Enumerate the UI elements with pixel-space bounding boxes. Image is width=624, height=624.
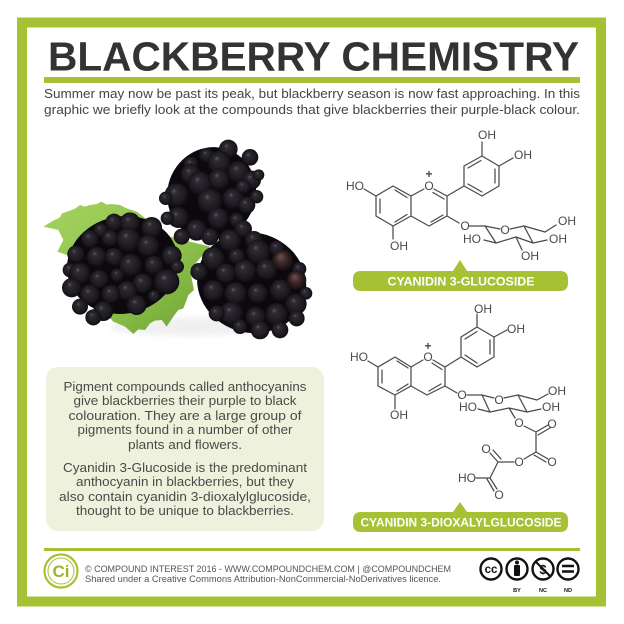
- icon: Creative Commons licence badges: NC: [539, 588, 547, 594]
- top berry: [152, 132, 271, 254]
- panel: anthocyanin description: also contain cyanidin 3-dioxalylglucoside,: [59, 490, 311, 504]
- icon: Creative Commons licence badges: cc: [485, 564, 498, 576]
- photo: blackberries on a leaf: [43, 132, 319, 347]
- panel: anthocyanin description: thought to be unique to blackberries.: [76, 504, 294, 518]
- molecule: cyanidin 3-glucoside: OH: [558, 214, 576, 228]
- molecule: cyanidin 3-glucoside: OH: [514, 148, 532, 162]
- molecule: cyanidin 3-dioxalylglucoside: O: [457, 388, 467, 402]
- icon: Creative Commons licence badges: [480, 558, 578, 594]
- icon: Creative Commons licence badges: BY: [513, 588, 521, 594]
- label: cyanidin 3-glucoside: [353, 260, 568, 291]
- molecule: cyanidin 3-glucoside: OH: [390, 239, 408, 253]
- molecule: cyanidin 3-dioxalylglucoside: OH: [390, 408, 408, 422]
- icon: Creative Commons licence badges: ND: [564, 588, 572, 594]
- footer credits: © COMPOUND INTEREST 2016 - WWW.COMPOUNDCHEM.COM | @COMPOUNDCHEM: [85, 564, 451, 574]
- molecule: cyanidin 3-glucoside: HO: [346, 179, 364, 193]
- footer credits: [85, 564, 451, 584]
- molecule: cyanidin 3-dioxalylglucoside: HO: [458, 471, 476, 485]
- panel: anthocyanin description: Pigment compounds called anthocyanins: [64, 380, 306, 394]
- molecule: cyanidin 3-dioxalylglucoside: O: [423, 350, 433, 364]
- panel: anthocyanin description: give blackberries their purple to black: [74, 394, 297, 408]
- right berry: [184, 218, 319, 347]
- panel: anthocyanin description: plants and flowers.: [128, 438, 242, 452]
- molecule: cyanidin 3-dioxalylglucoside: HO: [350, 350, 368, 364]
- footer credits: Shared under a Creative Commons Attribution-NonCommercial-NoDerivatives licence.: [85, 574, 441, 584]
- leaf: [43, 202, 210, 334]
- molecule: cyanidin 3-dioxalylglucoside: HO: [459, 400, 477, 414]
- molecule: cyanidin 3-dioxalylglucoside: O: [494, 393, 504, 407]
- molecule: cyanidin 3-dioxalylglucoside: OH: [542, 400, 560, 414]
- molecule: cyanidin 3-dioxalylglucoside: +: [424, 339, 432, 353]
- molecule: cyanidin 3-glucoside: OH: [478, 128, 496, 142]
- title: BLACKBERRY CHEMISTRY: [48, 34, 579, 80]
- molecule: cyanidin 3-glucoside: O: [460, 219, 470, 233]
- molecule: cyanidin 3-dioxalylglucoside: OH: [548, 384, 566, 398]
- label: cyanidin 3-dioxalylglucoside: CYANIDIN 3-DIOXALYLGLUCOSIDE: [360, 516, 562, 530]
- panel: anthocyanin description: [46, 367, 324, 531]
- left berry: [58, 206, 188, 325]
- icon: Creative Commons licence badges: $: [539, 562, 547, 577]
- label: cyanidin 3-dioxalylglucoside: [353, 502, 568, 532]
- footer rule: [44, 548, 580, 551]
- molecule: cyanidin 3-glucoside: O: [500, 223, 510, 237]
- molecule: cyanidin 3-dioxalylglucoside: O: [547, 417, 557, 431]
- molecule: cyanidin 3-dioxalylglucoside: O: [547, 455, 557, 469]
- molecule: cyanidin 3-dioxalylglucoside: O: [481, 442, 491, 456]
- molecule: cyanidin 3-dioxalylglucoside: OH: [507, 322, 525, 336]
- molecule: cyanidin 3-glucoside: OH: [521, 249, 539, 263]
- intro text: [44, 86, 580, 117]
- panel: anthocyanin description: colouration. They are a large group of: [68, 409, 302, 423]
- intro text: Summer may now be past its peak, but blackberry season is now fast approaching. In this: [44, 86, 580, 101]
- molecule: cyanidin 3-dioxalylglucoside: OH: [474, 302, 492, 316]
- molecule: cyanidin 3-dioxalylglucoside: O: [494, 488, 504, 502]
- icon: Compound Interest logo: Ci: [52, 562, 70, 581]
- title rule: [44, 77, 580, 83]
- icon: Compound Interest logo: [44, 554, 78, 588]
- molecule: cyanidin 3-glucoside: O: [424, 179, 434, 193]
- molecule: cyanidin 3-dioxalylglucoside: O: [514, 416, 524, 430]
- molecule: cyanidin 3-dioxalylglucoside: [350, 302, 566, 502]
- molecule: cyanidin 3-glucoside: HO: [463, 232, 481, 246]
- panel: anthocyanin description: anthocyanin in blackberries, but they: [76, 475, 295, 489]
- molecule: cyanidin 3-glucoside: +: [425, 167, 433, 181]
- molecule: cyanidin 3-dioxalylglucoside: O: [514, 455, 524, 469]
- molecule: cyanidin 3-glucoside: OH: [549, 232, 567, 246]
- intro text: graphic we briefly look at the compounds that give blackberries their purple-black colour.: [44, 102, 580, 117]
- molecule: cyanidin 3-glucoside: [346, 128, 576, 263]
- label: cyanidin 3-glucoside: CYANIDIN 3-GLUCOSIDE: [388, 274, 534, 288]
- panel: anthocyanin description: pigments found in a number of other: [78, 423, 292, 437]
- panel: anthocyanin description: Cyanidin 3-Glucoside is the predominant: [63, 461, 308, 475]
